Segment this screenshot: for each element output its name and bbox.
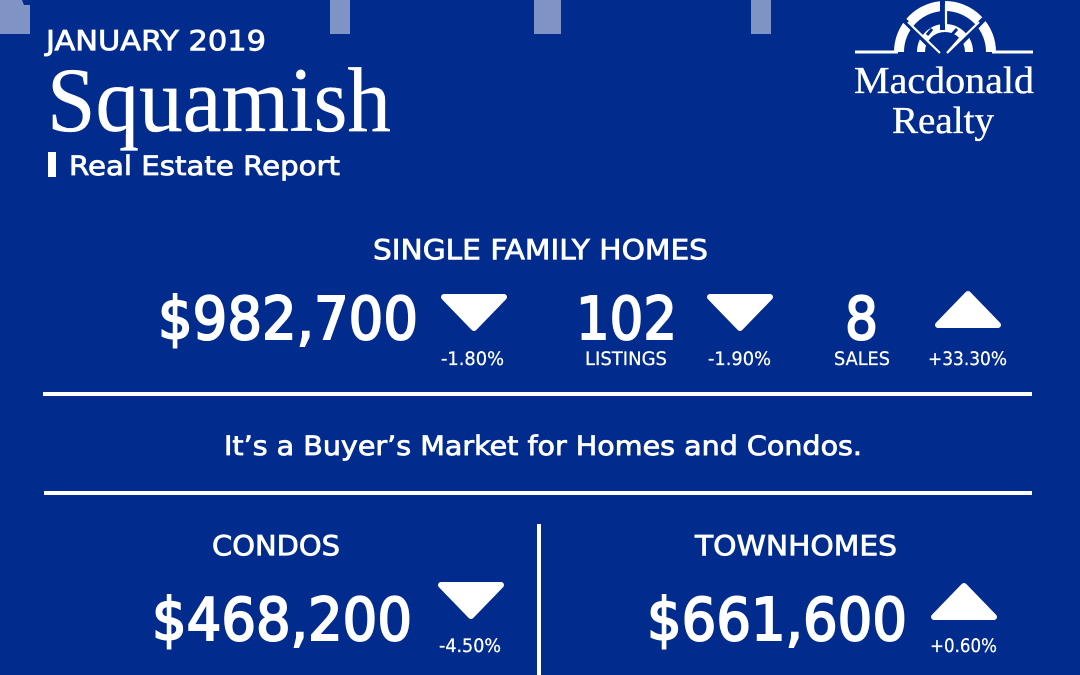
heading: TOWNHOMES: [694, 529, 897, 562]
change: -4.50%: [439, 635, 501, 657]
subtitle with bar: Real Estate Report: [69, 151, 340, 182]
logo: Macdonald Realty: Realty: [892, 100, 994, 142]
logo wordmark: Macdonald: [854, 60, 1034, 102]
listings stat: 102: [576, 284, 677, 353]
sales stat: 8: [845, 284, 878, 353]
heading: SINGLE FAMILY HOMES: [373, 233, 708, 266]
arrow up: [934, 586, 994, 617]
price: $661,600: [647, 585, 907, 654]
arrow up: [938, 294, 998, 325]
change: -1.80%: [441, 348, 504, 370]
listings label: LISTINGS: [585, 348, 667, 370]
change: -1.90%: [708, 348, 771, 370]
change: +33.30%: [928, 348, 1007, 370]
heading: CONDOS: [212, 529, 340, 562]
section: townhomes: [647, 529, 997, 657]
market statement: It’s a Buyer’s Market for Homes and Condos.: [224, 431, 862, 462]
change: +0.60%: [930, 635, 997, 657]
sales label: SALES: [834, 348, 890, 370]
date heading: JANUARY 2019: [44, 24, 266, 57]
price: $468,200: [152, 585, 412, 654]
price stat: $982,700: [158, 284, 418, 353]
arrow down: [441, 585, 501, 616]
section: condos: [152, 529, 501, 657]
arrow down: [444, 297, 504, 328]
logo: Macdonald Realty: [854, 0, 1034, 142]
arrow down: [710, 297, 770, 328]
logo emblem: [855, 0, 1033, 54]
title: Squamish: [47, 49, 391, 151]
section: single family homes: [158, 233, 1007, 370]
top tabs decoration: [0, 0, 771, 34]
